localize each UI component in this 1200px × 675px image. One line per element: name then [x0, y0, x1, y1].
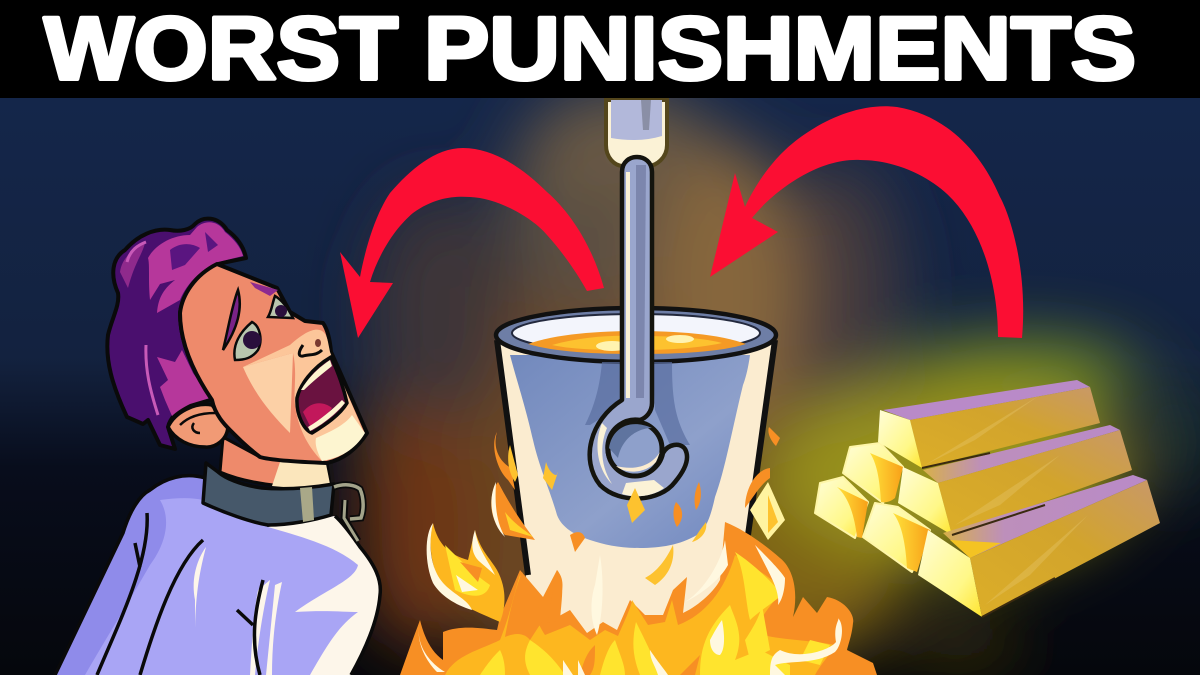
flame orange inner tongues	[505, 570, 700, 675]
hair	[107, 219, 246, 449]
hook handle	[606, 100, 667, 166]
hook highlights	[597, 172, 664, 496]
back left upper bar	[843, 443, 903, 503]
bucket outer edges	[497, 340, 775, 575]
neck	[220, 437, 330, 487]
flame cream highlights	[419, 523, 842, 675]
molten gold surface	[528, 331, 746, 354]
flame left tongue	[431, 523, 504, 622]
left red arrow	[340, 148, 604, 338]
near brow	[223, 290, 240, 350]
back left low bar	[815, 477, 868, 538]
yellow flame mass	[445, 555, 835, 675]
title text: PUNISHMENTS	[424, 0, 1136, 98]
hook shadow	[585, 362, 690, 445]
nose	[299, 345, 322, 356]
open mouth	[297, 357, 347, 433]
far brow	[250, 282, 278, 296]
title text: WORST	[44, 0, 398, 98]
hook shaft and ring	[590, 157, 687, 499]
flames	[400, 427, 877, 675]
stack of gold bars	[815, 380, 1160, 617]
top bar	[883, 380, 1090, 420]
bucket of molten gold	[496, 308, 776, 640]
bar shadow lines	[922, 453, 1055, 617]
collar ring and chain	[334, 485, 363, 519]
bucket rim	[496, 308, 776, 362]
face	[180, 264, 367, 463]
title banner	[0, 0, 1200, 98]
hanging hook	[590, 100, 687, 499]
hair highlights	[148, 222, 243, 313]
hook eye	[608, 422, 662, 476]
far eye	[268, 296, 293, 318]
middle low bar	[863, 503, 930, 572]
shirt outline and folds	[55, 476, 380, 675]
right red arrow	[710, 106, 1023, 338]
bottom bar	[943, 475, 1147, 558]
flame bright yellow	[480, 552, 830, 675]
outer orange flame	[400, 522, 877, 675]
shirt highlights	[268, 516, 380, 675]
flame fragments on bucket	[494, 427, 780, 552]
person with iron collar	[55, 219, 380, 675]
near eye	[234, 322, 260, 360]
bucket body	[496, 340, 776, 640]
collar	[203, 463, 334, 525]
shirt	[55, 476, 380, 675]
bucket blue shading	[510, 355, 750, 548]
face light patch	[243, 330, 364, 461]
ear	[168, 404, 228, 447]
middle bar	[923, 425, 1120, 483]
